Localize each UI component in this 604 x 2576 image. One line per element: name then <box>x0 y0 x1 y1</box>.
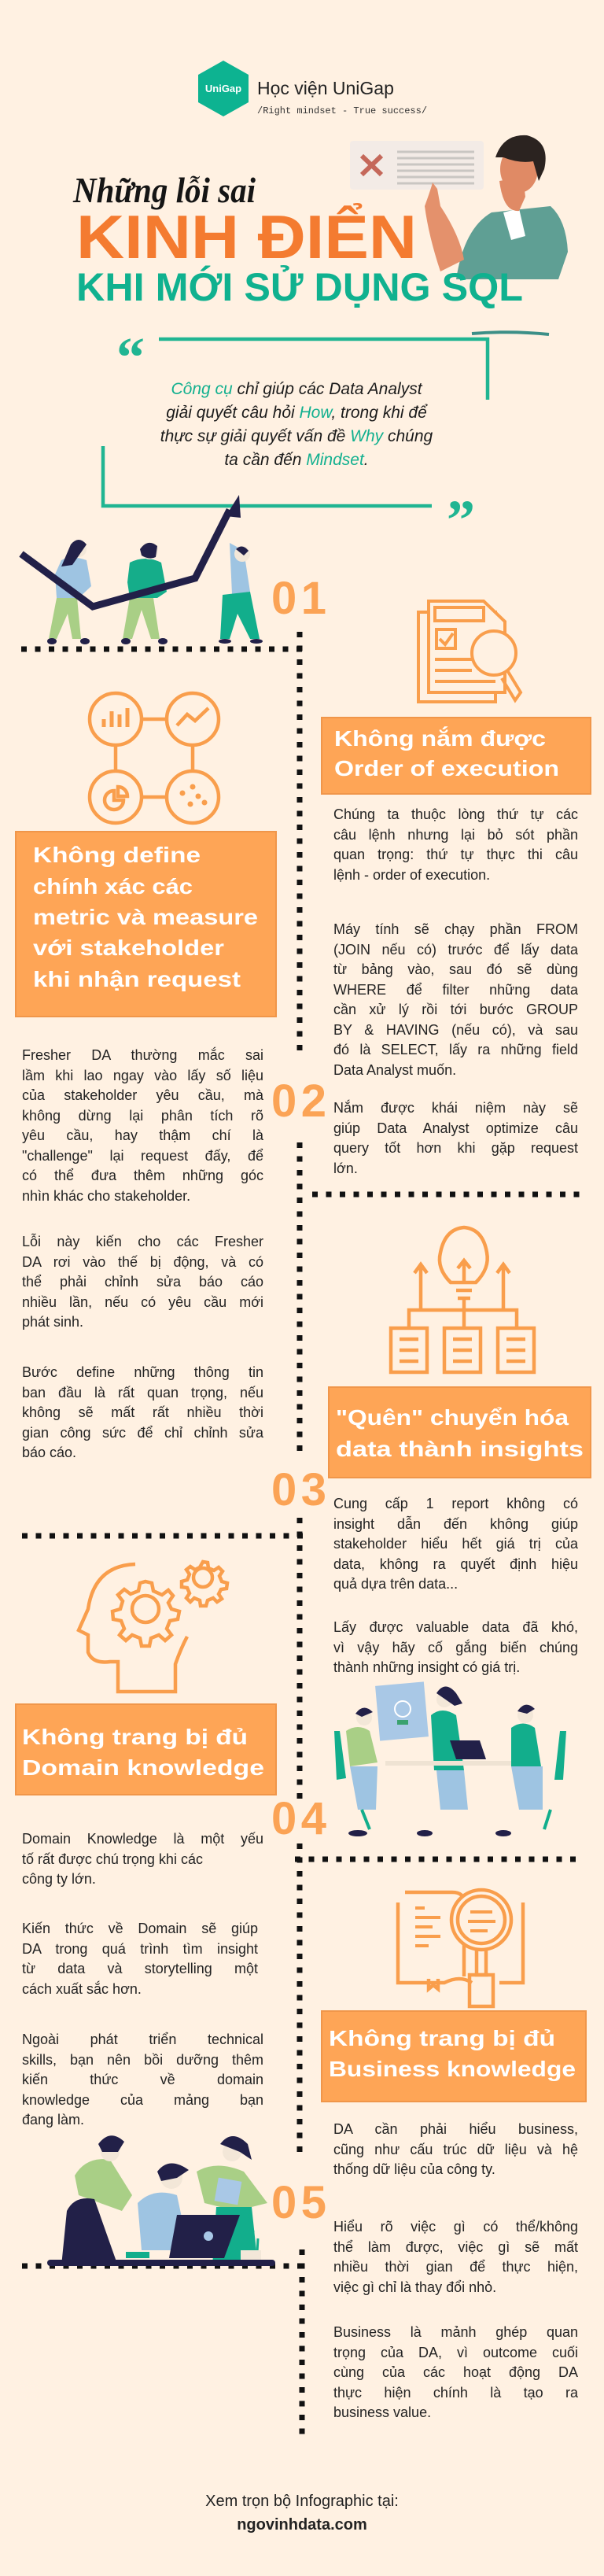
text: order of execution <box>333 806 578 883</box>
box: domain knowledge <box>16 1704 276 1795</box>
text: order steps: Máy tính sẽ chạy phần FROM <box>333 921 578 937</box>
text: fresher mistake: của stakeholder yêu cầu, mà <box>22 1087 263 1103</box>
text: business value: trọng của DA, vì outcome cuối <box>333 2345 578 2360</box>
footer: Xem trọn bộ Infographic tại: <box>205 2493 399 2510</box>
text: domain helps: từ data và storytelling một <box>22 1961 258 1976</box>
logo <box>198 61 427 116</box>
text: beyond technical: knowledge của mảng bạn <box>22 2091 263 2107</box>
text: optimize: Nắm được khái niệm này sẽ <box>333 1100 578 1116</box>
text: valuable data <box>333 1619 578 1675</box>
text: fresher mistake: lầm khi lao ngay vào lấy số liệu <box>22 1067 263 1083</box>
text: order of execution: Chúng ta thuộc lòng thứ tự các <box>333 806 578 822</box>
timeline: dotted lines <box>21 632 580 2440</box>
text: beyond technical: skills, bạn nên bồi dưỡng thêm <box>22 2052 263 2068</box>
box: define metric: chính xác các <box>33 874 193 899</box>
text: understand work: thể làm được, việc gì sẽ mất <box>333 2239 578 2255</box>
text: fresher mistake: yêu cầu, hay thậm chí là <box>22 1127 263 1143</box>
box: define metric <box>16 832 276 1017</box>
logo: UniGap <box>205 83 241 94</box>
numbers: 05 <box>271 2177 326 2228</box>
text: insights <box>333 1496 578 1592</box>
numbers: 03 <box>271 1464 326 1515</box>
text: define step: báo cáo. <box>22 1445 76 1460</box>
text: domain helps <box>22 1921 258 1997</box>
footer <box>205 2493 399 2534</box>
illustration: confused man with error card <box>350 135 568 279</box>
illustration: meeting team <box>334 1681 566 1836</box>
text: order of execution: câu lệnh nhưng lại bỏ sót phần <box>333 826 578 842</box>
text: beyond technical: Ngoài phát triển technical <box>22 2032 263 2047</box>
box: define metric: metric và measure <box>33 905 258 929</box>
text: consequence: thể phải chỉnh sửa báo cáo <box>22 1274 263 1290</box>
text: order steps: từ bảng vào, sau đó sẽ dùng <box>333 961 578 977</box>
text: fresher mistake: có thể đưa thêm những góc <box>22 1168 263 1183</box>
text: business: DA cần phải hiểu business, <box>333 2121 578 2137</box>
logo: /Right mindset - True success/ <box>257 105 427 116</box>
box: insights: data thành insights <box>336 1437 584 1461</box>
numbers: 02 <box>271 1076 326 1127</box>
icon: four analytics circles <box>90 693 219 823</box>
text: order steps: Data Analyst muốn. <box>333 1062 456 1078</box>
title: KINH ĐIỂN <box>76 202 417 271</box>
icon: head with gears <box>79 1562 227 1692</box>
text: order steps: (JOIN nếu có) trước để lấy data <box>333 941 578 957</box>
text: business <box>333 2121 578 2177</box>
quote frame: “ <box>116 326 145 389</box>
numbers: 01 <box>271 573 326 624</box>
box: Order of execution <box>322 718 591 794</box>
text: business value: cùng của các hoạt động DA <box>333 2364 578 2380</box>
icon: book with magnifier <box>398 1890 523 2006</box>
box: domain knowledge: Không trang bị đủ <box>22 1725 248 1749</box>
text: consequence: DA rơi vào thế bị động, và có <box>22 1254 263 1270</box>
text: define step: ban đầu là rất quan trọng, nếu <box>22 1385 263 1401</box>
text: domain helps: DA trong quá trình tìm insight <box>22 1940 258 1956</box>
text: domain helps: Kiến thức về Domain sẽ giúp <box>22 1921 258 1936</box>
quote text: thực sự giải quyết vấn đề Why chúng <box>160 427 433 445</box>
title: Những lỗi sai <box>72 170 256 210</box>
box: business knowledge <box>322 2011 586 2102</box>
text: define step: gian công sức để chỉ chỉnh sửa <box>22 1424 263 1440</box>
text: domain knowledge <box>22 1831 263 1887</box>
text: valuable data: Lấy được valuable data đã khó, <box>333 1619 578 1635</box>
text: order steps: WHERE để filter những data <box>333 982 578 998</box>
text: domain knowledge: Domain Knowledge là một yếu <box>22 1831 263 1847</box>
text: insights: data, không ra quyết định hiệu <box>333 1556 578 1572</box>
text: order of execution: lệnh - order of execution. <box>333 867 490 883</box>
text: optimize: lớn. <box>333 1160 358 1175</box>
text: beyond technical: đang làm. <box>22 2112 84 2128</box>
text: understand work: nhiều thời gian để thực hiện, <box>333 2259 578 2275</box>
text: valuable data: thành những insight có giá trị. <box>333 1659 520 1675</box>
text: fresher mistake: Fresher DA thường mắc sai <box>22 1047 263 1063</box>
illustration: team at laptop <box>47 2135 275 2266</box>
text: fresher mistake: không dừng lại phân tích rõ <box>22 1108 263 1124</box>
box: Order of execution: Order of execution <box>334 756 559 781</box>
quote text <box>160 380 433 469</box>
text: business value <box>333 2324 578 2420</box>
text: insights: Cung cấp 1 report không có <box>333 1496 578 1511</box>
box: insights <box>329 1387 591 1478</box>
text: business value: Business là mảnh ghép quan <box>333 2324 578 2340</box>
text: business: thống dữ liệu của công ty. <box>333 2161 495 2177</box>
text: understand work: việc gì chỉ là thay đổi nhỏ. <box>333 2279 496 2294</box>
text: domain knowledge: tố rất được chú trọng khi các <box>22 1851 203 1866</box>
text: domain knowledge: công ty lớn. <box>22 1871 96 1887</box>
text: consequence <box>22 1234 263 1330</box>
text: insights: quả dựa trên data... <box>333 1576 458 1592</box>
text: business value: thực hiện chính là tạo ra <box>333 2384 578 2400</box>
text: understand work: Hiểu rõ việc gì có thể/không <box>333 2219 578 2235</box>
text: business: cũng như cấu trúc dữ liệu và hệ <box>333 2142 578 2157</box>
box: define metric: khi nhận request <box>33 967 241 991</box>
text: understand work <box>333 2219 578 2295</box>
text: order steps <box>333 921 578 1078</box>
text: fresher mistake: nhìn khác cho stakeholder. <box>22 1188 190 1204</box>
box: business knowledge: Business knowledge <box>329 2057 576 2081</box>
box: define metric: với stakeholder <box>33 936 224 960</box>
text: consequence: Lỗi này kiến cho các Fresher <box>22 1234 263 1249</box>
icon: lightbulb with documents <box>391 1227 534 1372</box>
quote text: ta cần đến Mindset. <box>224 451 369 469</box>
footer: ngovinhdata.com <box>237 2516 367 2534</box>
text: consequence: phát sinh. <box>22 1314 83 1330</box>
text: optimize <box>333 1100 578 1175</box>
text: order steps: BY & HAVING (nếu có), và sau <box>333 1021 578 1037</box>
text: insights: stakeholder hiểu hết giá trị của <box>333 1536 578 1552</box>
text: optimize: giúp Data Analyst optimize câu <box>333 1120 578 1136</box>
box: domain knowledge: Domain knowledge <box>22 1755 264 1780</box>
illustration: team lifting chart <box>21 495 263 644</box>
icon: document with magnifier <box>418 601 521 702</box>
box: Order of execution: Không nắm được <box>334 726 546 751</box>
text: fresher mistake: "challenge" lại request đấy, để <box>22 1147 263 1163</box>
logo: Học viện UniGap <box>257 78 394 98</box>
text: define step <box>22 1364 263 1460</box>
text: fresher mistake <box>22 1046 263 1204</box>
text: insights: insight dẫn đến không giúp <box>333 1515 578 1531</box>
box: define metric: Không define <box>33 843 201 867</box>
text: business value: business value. <box>333 2404 431 2420</box>
box: business knowledge: Không trang bị đủ <box>329 2026 555 2050</box>
text: order steps: đó là SELECT, lấy ra những field <box>333 1042 578 1057</box>
text: optimize: query tốt hơn khi gặp request <box>333 1140 578 1156</box>
text: define step: không sẽ mất rất nhiều thời <box>22 1404 263 1420</box>
text: consequence: nhiều lần, nếu có yêu cầu mới <box>22 1294 263 1309</box>
title <box>72 170 549 334</box>
quote frame: ” <box>447 489 475 552</box>
text: beyond technical <box>22 2032 263 2128</box>
text: valuable data: vì vậy hãy cố gắng biến chúng <box>333 1640 578 1655</box>
text: order steps: cần xử lý rồi tới bước GROUP <box>333 1002 578 1017</box>
text: order of execution: quan trọng: thứ tự thực thi câu <box>333 847 578 862</box>
quote frame <box>103 326 488 552</box>
numbers <box>271 573 326 2228</box>
numbers: 04 <box>271 1793 326 1844</box>
text: domain helps: cách xuất sắc hơn. <box>22 1981 142 1997</box>
box: insights: "Quên" chuyển hóa <box>336 1405 569 1430</box>
quote text: Công cụ chỉ giúp các Data Analyst <box>171 380 422 398</box>
quote text: giải quyết câu hỏi How, trong khi để <box>166 404 427 422</box>
text: define step: Bước define những thông tin <box>22 1364 263 1380</box>
text: beyond technical: kiến thức về domain <box>22 2072 263 2087</box>
title: KHI MỚI SỬ DỤNG SQL <box>76 264 523 309</box>
